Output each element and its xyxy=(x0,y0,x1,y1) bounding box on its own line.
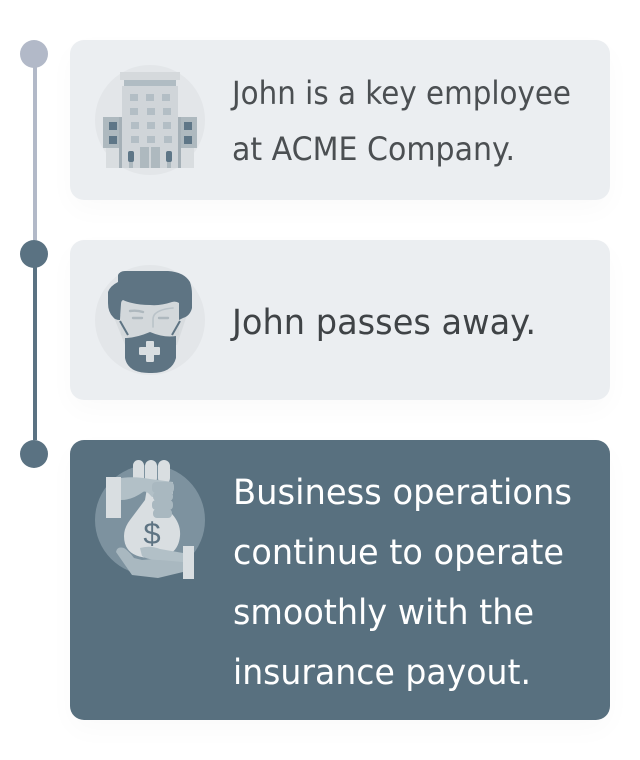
dollar sign: $ xyxy=(143,516,161,551)
right cuff xyxy=(183,546,194,579)
icon: man in medical mask xyxy=(95,265,205,375)
card background xyxy=(70,240,610,400)
text: Business operations continue: insurance payout. xyxy=(233,653,531,693)
timeline dot 2 xyxy=(20,240,48,268)
left cuff xyxy=(106,477,121,518)
panel: key employee xyxy=(70,40,610,200)
text: Business operations continue: smoothly with the xyxy=(233,593,534,633)
timeline dot 3 xyxy=(20,440,48,468)
text: Business operations continue: continue to operate xyxy=(233,533,564,573)
card background xyxy=(70,440,610,720)
timeline connector: second segment xyxy=(33,254,37,440)
icon: office building xyxy=(95,65,205,175)
panel: passes away xyxy=(70,240,610,400)
text: John is a key employee: at ACME Company. xyxy=(232,130,515,168)
timeline connector: first segment xyxy=(33,54,37,240)
timeline dot 1 xyxy=(20,40,48,68)
text: Business operations continue: Business operations xyxy=(233,473,572,513)
panel: business continues xyxy=(70,440,610,720)
icon: hand passing money bag xyxy=(95,460,205,579)
text: John is a key employee: John is a key employee xyxy=(230,74,571,112)
text: John passes away: John passes away. xyxy=(230,303,536,343)
card background xyxy=(70,40,610,200)
